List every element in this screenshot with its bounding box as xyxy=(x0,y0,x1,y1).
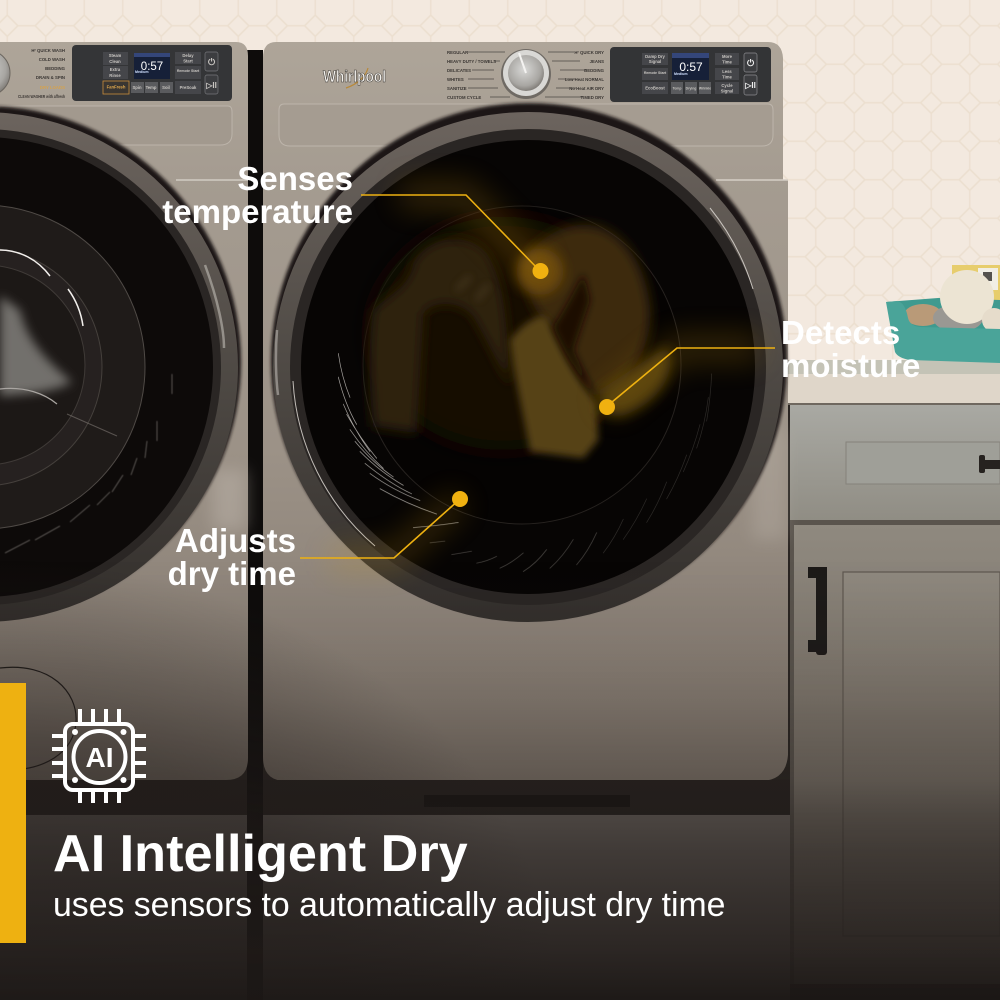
buttons: Wrinkle xyxy=(699,86,711,90)
bottom fade xyxy=(0,560,1000,1000)
cycle dial labels: SANITIZE xyxy=(447,86,467,91)
icon: AI chip: AI xyxy=(86,742,114,773)
inner drum rim xyxy=(363,206,681,524)
door ring xyxy=(273,112,783,622)
label: Adjusts xyxy=(175,522,296,559)
buttons: Temp xyxy=(146,85,157,90)
base haze xyxy=(370,217,637,450)
door handle xyxy=(808,567,827,655)
buttons: Damp Dry xyxy=(645,54,666,59)
buttons: Steam xyxy=(109,53,122,58)
door seal shadow xyxy=(0,106,241,618)
drawer pull xyxy=(979,455,1000,473)
cycle dial labels: REGULAR xyxy=(447,50,469,55)
title: AI Intelligent Dry xyxy=(53,825,468,883)
cycle dial labels: COLD WASH xyxy=(39,57,65,62)
buttons: PreSoak xyxy=(180,85,197,90)
label: temperature xyxy=(162,193,353,230)
handle recess xyxy=(279,104,773,146)
left fold xyxy=(370,239,510,433)
control panel xyxy=(72,45,232,101)
fold sheen xyxy=(457,277,488,300)
buttons: ▷II xyxy=(744,81,756,90)
sensor dot xyxy=(599,399,615,415)
dryer balls xyxy=(904,270,1000,332)
cycle dial labels: WHITES xyxy=(447,77,464,82)
display xyxy=(672,53,709,80)
buttons: Extra xyxy=(110,67,121,72)
buttons: EcoBoost xyxy=(645,86,665,90)
buttons xyxy=(642,53,757,95)
buttons: Rinse xyxy=(109,73,121,78)
buttons: Less xyxy=(722,69,732,74)
cycle dial labels: HEAVY DUTY / TOWELS xyxy=(447,59,496,64)
label: dry time xyxy=(168,555,296,592)
upper right lobe xyxy=(526,225,650,397)
cycle dial labels: JEANS xyxy=(590,59,604,64)
cycle dial labels xyxy=(18,48,66,99)
buttons: ▷II xyxy=(205,81,217,90)
buttons: Remote Start xyxy=(644,71,667,75)
cycle dial labels: Low Heat NORMAL xyxy=(565,77,604,82)
pedestals xyxy=(0,780,790,1000)
drawer cabinet xyxy=(790,405,1000,520)
sensor dot xyxy=(452,491,468,507)
buttons: FanFresh xyxy=(107,84,126,90)
icon: AI chip xyxy=(52,709,146,803)
background: tiled wall xyxy=(0,0,1000,380)
cycle dial labels: CUSTOM CYCLE xyxy=(447,95,481,100)
display: 0:57 xyxy=(141,61,163,73)
callout: detects moisture xyxy=(599,314,920,415)
ring highlights xyxy=(276,208,753,546)
buttons: Start xyxy=(183,58,193,64)
buttons: Signal xyxy=(649,59,661,64)
gap between appliances xyxy=(247,50,263,1000)
display xyxy=(134,53,170,79)
cycle dial labels xyxy=(447,50,605,100)
cycle dial labels: H² QUICK WASH xyxy=(31,48,65,53)
glow xyxy=(606,348,760,407)
buttons: Cycle xyxy=(721,83,733,88)
right wedge xyxy=(600,347,670,417)
baffle xyxy=(0,296,72,396)
washer body xyxy=(0,42,248,780)
control knob xyxy=(501,49,551,99)
buttons: Time xyxy=(722,60,733,64)
buttons: Time xyxy=(722,74,733,80)
buttons: Delay xyxy=(182,53,194,58)
teal basket front xyxy=(886,301,1000,363)
dot glow xyxy=(517,248,563,295)
countertop xyxy=(785,360,1000,405)
brighter side column xyxy=(752,430,786,540)
door seal shadow xyxy=(271,103,787,619)
label: Detects xyxy=(781,314,900,351)
cycle dial labels: DRAIN & SPIN xyxy=(36,75,65,80)
brand logo: Whirlpool xyxy=(323,68,386,86)
left scrim xyxy=(0,560,560,1000)
leader line xyxy=(300,499,460,558)
cycle dial labels: CLEAN WASHER with affresh xyxy=(18,94,65,99)
lower centre fold xyxy=(510,316,598,458)
left washer xyxy=(0,42,248,780)
basket with dryer balls xyxy=(886,265,1000,363)
box behind the basket xyxy=(952,265,1000,305)
callout: senses temperature xyxy=(162,160,548,279)
cycle dial labels: BEDDING xyxy=(45,66,66,71)
buttons: Temp xyxy=(673,86,681,90)
fold shadow xyxy=(553,273,593,393)
door cabinet xyxy=(790,520,1000,1000)
spinning ticks xyxy=(5,374,172,553)
inner drum rim xyxy=(0,205,145,529)
cycle dial labels: No Heat AIR DRY xyxy=(569,86,604,91)
knob edge xyxy=(0,50,10,96)
subtitle: uses sensors to automatically adjust dry time xyxy=(53,886,725,924)
right washer xyxy=(263,42,788,781)
buttons: Remote Start xyxy=(177,69,200,73)
buttons: Clean xyxy=(109,59,121,64)
cycle dial labels: H² QUICK DRY xyxy=(574,50,604,55)
cycle dial labels: TIMED DRY xyxy=(581,95,604,100)
buttons: Soil xyxy=(162,85,170,90)
buttons: ⏻ xyxy=(747,58,755,69)
buttons: Spin xyxy=(132,85,142,90)
leader line xyxy=(606,348,775,407)
cycle dial labels: BEDDING xyxy=(584,68,605,73)
display: 0:57 xyxy=(679,60,703,74)
glow xyxy=(330,499,460,558)
basket back rim xyxy=(886,298,1000,330)
callout: adjusts dry time xyxy=(168,491,468,592)
handle recess xyxy=(0,106,232,145)
cycle dial labels: DELICATES xyxy=(447,68,471,73)
buttons: Signal xyxy=(721,88,733,94)
drum blade streaks xyxy=(338,354,712,572)
control panel xyxy=(610,47,771,102)
buttons xyxy=(103,52,218,94)
accent bar xyxy=(0,683,26,943)
washer body xyxy=(263,42,788,781)
buttons: Drying xyxy=(686,86,696,90)
side panel highlight xyxy=(212,470,246,530)
laundry in drum xyxy=(370,217,670,458)
door latch outline xyxy=(0,667,76,770)
buttons: More xyxy=(722,54,733,59)
buttons: ⏻ xyxy=(208,57,216,68)
cycle dial labels: DRY LOADS xyxy=(40,85,65,90)
label: Senses xyxy=(237,160,353,197)
display: Medium xyxy=(674,72,688,76)
glow xyxy=(400,195,540,271)
label: moisture xyxy=(781,347,920,384)
door ring xyxy=(0,112,238,622)
drum back xyxy=(0,265,85,465)
leader line xyxy=(361,195,540,271)
ring highlight xyxy=(205,265,224,348)
display: Medium xyxy=(135,70,149,74)
sensor dot xyxy=(532,263,548,279)
